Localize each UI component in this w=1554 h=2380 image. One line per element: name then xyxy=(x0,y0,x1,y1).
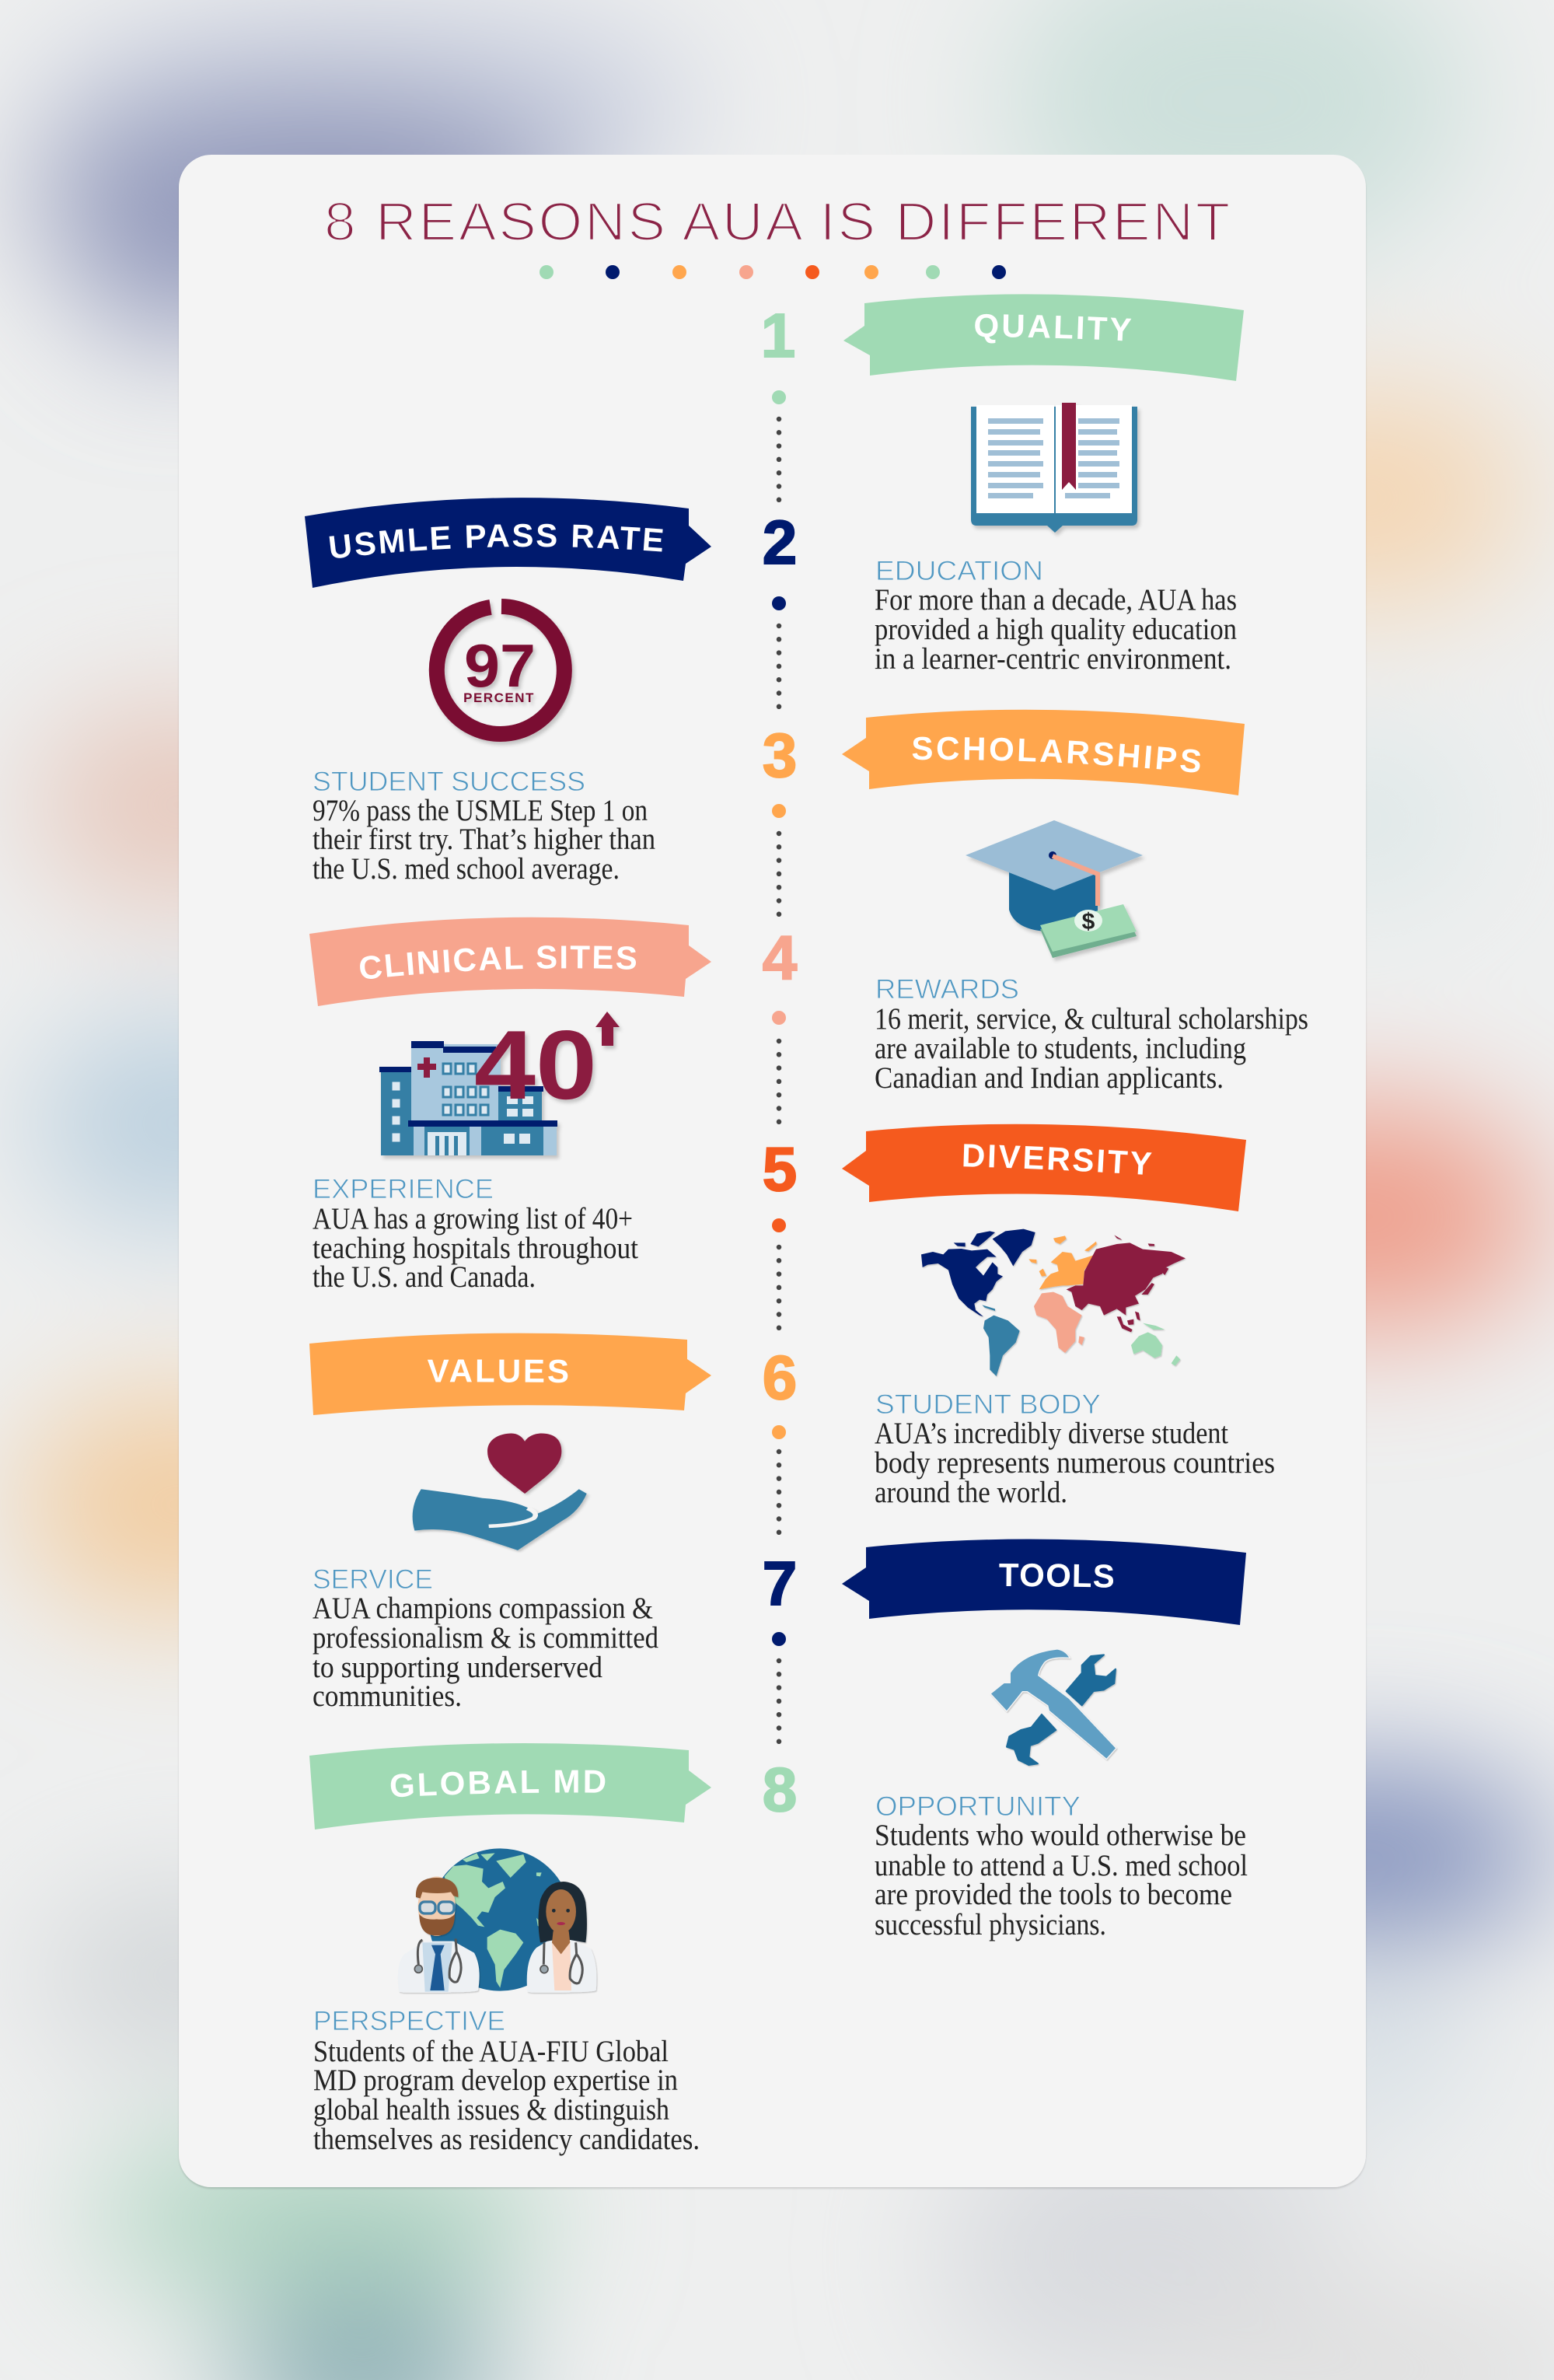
number 4: 4 xyxy=(763,923,798,992)
icon: 97 percent ring xyxy=(437,606,564,734)
text block: opportunity: OPPORTUNITY xyxy=(875,1791,1081,1822)
banner: quality xyxy=(843,294,1244,381)
text block: rewards xyxy=(875,974,1308,1095)
text block: rewards: 16 merit, service, & cultural scholarships xyxy=(875,1002,1308,1036)
text block: perspective: MD program develop expertise in xyxy=(313,2064,678,2097)
icon: 97 percent ring: PERCENT xyxy=(463,690,535,705)
text block: rewards: REWARDS xyxy=(875,974,1019,1005)
banner: diversity xyxy=(842,1124,1246,1211)
banner: tools xyxy=(842,1539,1246,1625)
text block: student success: STUDENT SUCCESS xyxy=(313,767,585,797)
banner: quality: QUALITY xyxy=(975,314,1132,344)
icon: hand with heart xyxy=(413,1434,587,1550)
banner: values: VALUES xyxy=(428,1359,567,1382)
banner: values xyxy=(309,1333,711,1415)
banner: diversity: DIVERSITY xyxy=(963,1144,1152,1175)
number 3: 3 xyxy=(763,721,797,790)
text block: experience: the U.S. and Canada. xyxy=(313,1260,536,1294)
text block: perspective: Students of the AUA-FIU Global xyxy=(313,2035,669,2068)
number 1: 1 xyxy=(761,301,795,370)
banner: scholarships xyxy=(842,709,1245,795)
icon: open book xyxy=(971,403,1137,533)
text block: opportunity: Students who would otherwise be xyxy=(875,1819,1246,1852)
text block: perspective: PERSPECTIVE xyxy=(313,2006,505,2036)
text block: rewards: are available to students, including xyxy=(875,1032,1246,1065)
doctor: woman xyxy=(527,1882,596,1993)
icon: hospital with 40+: 40 xyxy=(474,1010,597,1120)
text block: opportunity: successful physicians. xyxy=(875,1908,1106,1941)
icon: graduation cap and money: $ xyxy=(1082,909,1095,935)
text block: student success: 97% pass the USMLE Step 1 on xyxy=(313,794,648,827)
text block: education: provided a high quality education xyxy=(875,613,1237,646)
icon: 97 percent ring: 97 xyxy=(464,631,536,700)
title: 8 REASONS AUA IS DIFFERENT xyxy=(324,191,1232,252)
title dots row xyxy=(540,265,1006,279)
text block: student success xyxy=(313,767,655,886)
text block: service: to supporting underserved xyxy=(313,1651,602,1684)
banner: scholarships: SCHOLARSHIPS xyxy=(913,737,1200,773)
number 5: 5 xyxy=(763,1134,797,1204)
icon: globe with two doctors xyxy=(398,1848,596,1993)
banner: clinical sites: CLINICAL SITES xyxy=(360,945,636,979)
text block: opportunity xyxy=(875,1791,1248,1941)
text block: experience: teaching hospitals throughout xyxy=(313,1232,638,1265)
text block: experience: AUA has a growing list of 40+ xyxy=(313,1202,633,1235)
text block: student body: body represents numerous countries xyxy=(875,1446,1275,1480)
icon: hospital with 40+ xyxy=(379,1010,620,1155)
text block: service: communities. xyxy=(313,1679,462,1713)
text block: student body: around the world. xyxy=(875,1476,1067,1509)
doctor: man xyxy=(398,1876,480,1993)
banner: global md xyxy=(309,1743,711,1830)
number 2: 2 xyxy=(763,508,797,577)
icon: crossed hammer and wrench xyxy=(991,1650,1116,1765)
text block: service: SERVICE xyxy=(313,1564,433,1595)
text block: service: AUA champions compassion & xyxy=(313,1592,653,1625)
text block: perspective: global health issues & distinguish xyxy=(313,2093,669,2127)
text block: student success: the U.S. med school average. xyxy=(313,852,620,886)
icon: graduation cap and money xyxy=(966,820,1143,958)
number 8: 8 xyxy=(763,1755,797,1824)
text block: perspective xyxy=(313,2006,700,2156)
text block: student body: STUDENT BODY xyxy=(875,1389,1101,1420)
text block: opportunity: unable to attend a U.S. med school xyxy=(875,1849,1248,1882)
text block: opportunity: are provided the tools to become xyxy=(875,1878,1232,1911)
text block: education: For more than a decade, AUA has xyxy=(875,583,1237,617)
icon: world map xyxy=(921,1229,1186,1376)
text block: education: in a learner-centric environment. xyxy=(875,642,1231,676)
card panel xyxy=(179,155,1366,2187)
timeline dots xyxy=(772,390,786,1744)
number 7: 7 xyxy=(763,1549,797,1618)
text block: rewards: Canadian and Indian applicants. xyxy=(875,1061,1224,1095)
text block: service: professionalism & is committed xyxy=(313,1621,658,1655)
text block: education xyxy=(875,556,1237,676)
banner: usmle pass rate xyxy=(305,498,711,588)
text block: perspective: themselves as residency candidates. xyxy=(313,2123,700,2156)
text block: experience xyxy=(313,1174,638,1294)
text block: education: EDUCATION xyxy=(875,556,1043,586)
text block: service xyxy=(313,1564,658,1713)
banner: clinical sites xyxy=(309,917,711,1006)
banner: tools: TOOLS xyxy=(999,1563,1113,1588)
number 6: 6 xyxy=(763,1343,797,1412)
banner: global md: GLOBAL MD xyxy=(390,1770,605,1798)
text block: student body xyxy=(875,1389,1275,1509)
text block: student success: their first try. That’s higher than xyxy=(313,823,655,856)
banner: usmle pass rate: USMLE PASS RATE xyxy=(330,524,663,558)
text block: experience: EXPERIENCE xyxy=(313,1174,494,1204)
text block: student body: AUA’s incredibly diverse student xyxy=(875,1417,1228,1450)
